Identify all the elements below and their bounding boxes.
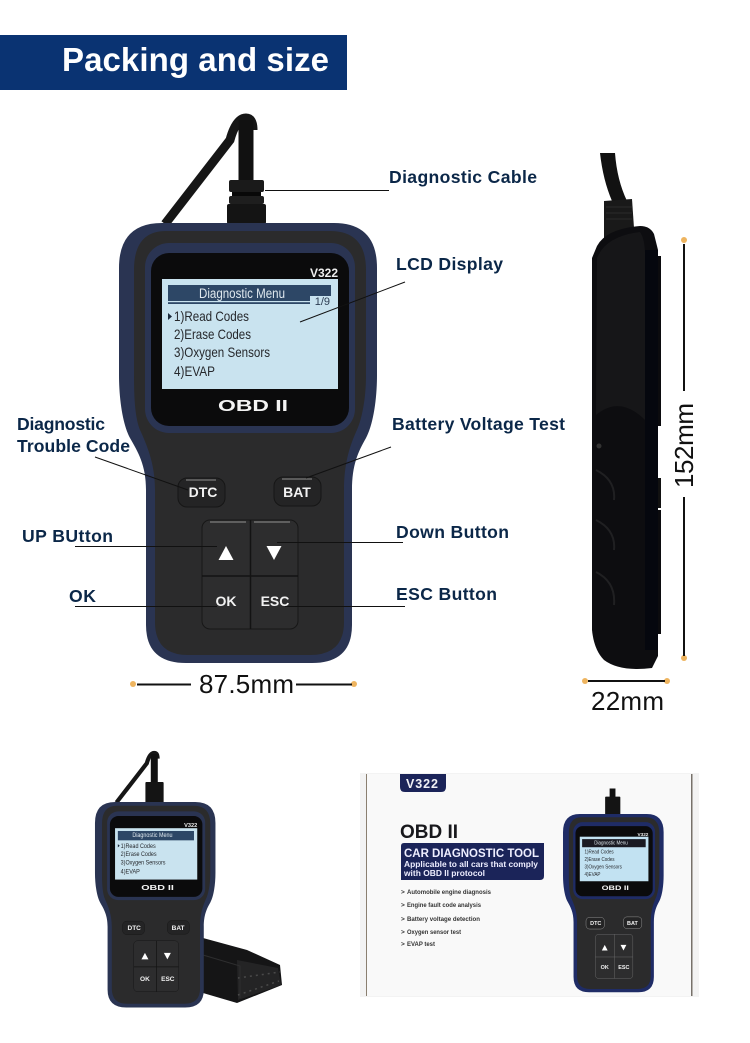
- main device front view: V322: [310, 266, 338, 280]
- LCD screen: 1)Read Codes: [174, 308, 249, 324]
- box feature list: >: [401, 916, 405, 923]
- BAT button: [274, 477, 321, 506]
- title banner: [0, 35, 347, 90]
- box device image: 4)EVAP: [584, 872, 601, 878]
- LCD screen: Diagnostic Menu: [199, 286, 285, 301]
- box feature list: Engine fault code analysis: [407, 902, 481, 909]
- box feature list: EVAP test: [407, 941, 436, 948]
- callout: diagnostic trouble code: Trouble Code: [17, 436, 130, 456]
- BAT button: BAT: [283, 484, 311, 500]
- callout: up button: UP BUtton: [22, 526, 113, 546]
- callout: down button: Down Button: [396, 522, 509, 542]
- box feature list: >: [401, 941, 405, 948]
- box device image: BAT: [627, 921, 638, 927]
- callout: diagnostic trouble code: Diagnostic: [17, 414, 105, 434]
- callout: diagnostic trouble code: [17, 414, 188, 490]
- box banner: with OBD II protocol: [403, 869, 485, 878]
- box device image: [563, 788, 664, 992]
- callout: ESC button: ESC Button: [396, 584, 497, 604]
- callout: LCD display: LCD Display: [396, 254, 503, 274]
- box device image: V322: [637, 832, 649, 838]
- box banner: Applicable to all cars that comply: [404, 860, 539, 869]
- box feature list: Oxygen sensor test: [407, 929, 462, 936]
- keypad: OK: [216, 593, 236, 609]
- callout: OK: OK: [69, 586, 96, 606]
- LCD screen: 1/9: [315, 296, 330, 308]
- width dimension: 87.5mm: [199, 669, 294, 699]
- callout: battery voltage test: [306, 414, 565, 478]
- small device photo: Diagnostic Menu: [132, 832, 173, 839]
- small device photo: 1)Read Codes: [121, 843, 156, 850]
- keypad: [202, 520, 298, 629]
- box device image: 2)Erase Codes: [584, 857, 615, 863]
- small device photo: BAT: [172, 925, 185, 932]
- main device front view: OBD II: [218, 398, 288, 415]
- box model tab: V322: [406, 777, 438, 791]
- device side view: [592, 153, 661, 669]
- box device image: DTC: [590, 921, 601, 927]
- callout: LCD display: [300, 254, 503, 322]
- callout: battery voltage test: Battery Voltage Test: [392, 414, 565, 434]
- box feature list: >: [401, 902, 405, 909]
- small device photo: V322: [184, 823, 197, 829]
- product box: [360, 773, 699, 997]
- small device photo: ESC: [161, 976, 175, 983]
- DTC button: DTC: [189, 484, 217, 500]
- LCD screen: 2)Erase Codes: [174, 326, 251, 342]
- box device image: ESC: [618, 965, 629, 971]
- small device photo: 3)Oxygen Sensors: [121, 860, 166, 867]
- box feature list: >: [401, 929, 405, 936]
- keypad: ESC: [261, 593, 289, 609]
- main device front view: [119, 118, 377, 663]
- LCD screen: [162, 279, 338, 389]
- thickness dimension: 22mm: [591, 686, 664, 716]
- thickness dimension: [582, 678, 670, 716]
- LCD screen: 3)Oxygen Sensors: [174, 344, 270, 360]
- small device photo: OBD II: [141, 883, 174, 892]
- box banner: CAR DIAGNOSTIC TOOL: [404, 848, 539, 860]
- title banner: Packing and size: [62, 41, 329, 78]
- box feature list: Automobile engine diagnosis: [407, 889, 491, 896]
- box device image: 1)Read Codes: [584, 850, 614, 856]
- product box: OBD II: [400, 822, 458, 843]
- small device photo: 2)Erase Codes: [121, 851, 157, 858]
- DTC button: [178, 478, 225, 507]
- small device photo: DTC: [127, 925, 141, 932]
- width dimension: [130, 669, 357, 699]
- small device photo: 4)EVAP: [121, 868, 140, 875]
- box model tab: [400, 774, 446, 792]
- LCD screen: 4)EVAP: [174, 363, 215, 379]
- box device image: Diagnostic Menu: [594, 840, 628, 846]
- height dimension: [669, 237, 699, 661]
- box device image: 3)Oxygen Sensors: [584, 864, 622, 870]
- small device photo: OK: [140, 976, 150, 983]
- box device image: OBD II: [602, 885, 629, 892]
- box device image: OK: [601, 965, 609, 971]
- small device photo: [95, 753, 215, 1008]
- callout: diagnostic cable: Diagnostic Cable: [389, 167, 537, 187]
- box feature list: Battery voltage detection: [407, 916, 480, 923]
- OBD connector: [203, 938, 282, 1003]
- height dimension: 152mm: [669, 403, 699, 488]
- box feature list: [401, 889, 491, 948]
- box feature list: >: [401, 889, 405, 896]
- box banner: [401, 843, 544, 880]
